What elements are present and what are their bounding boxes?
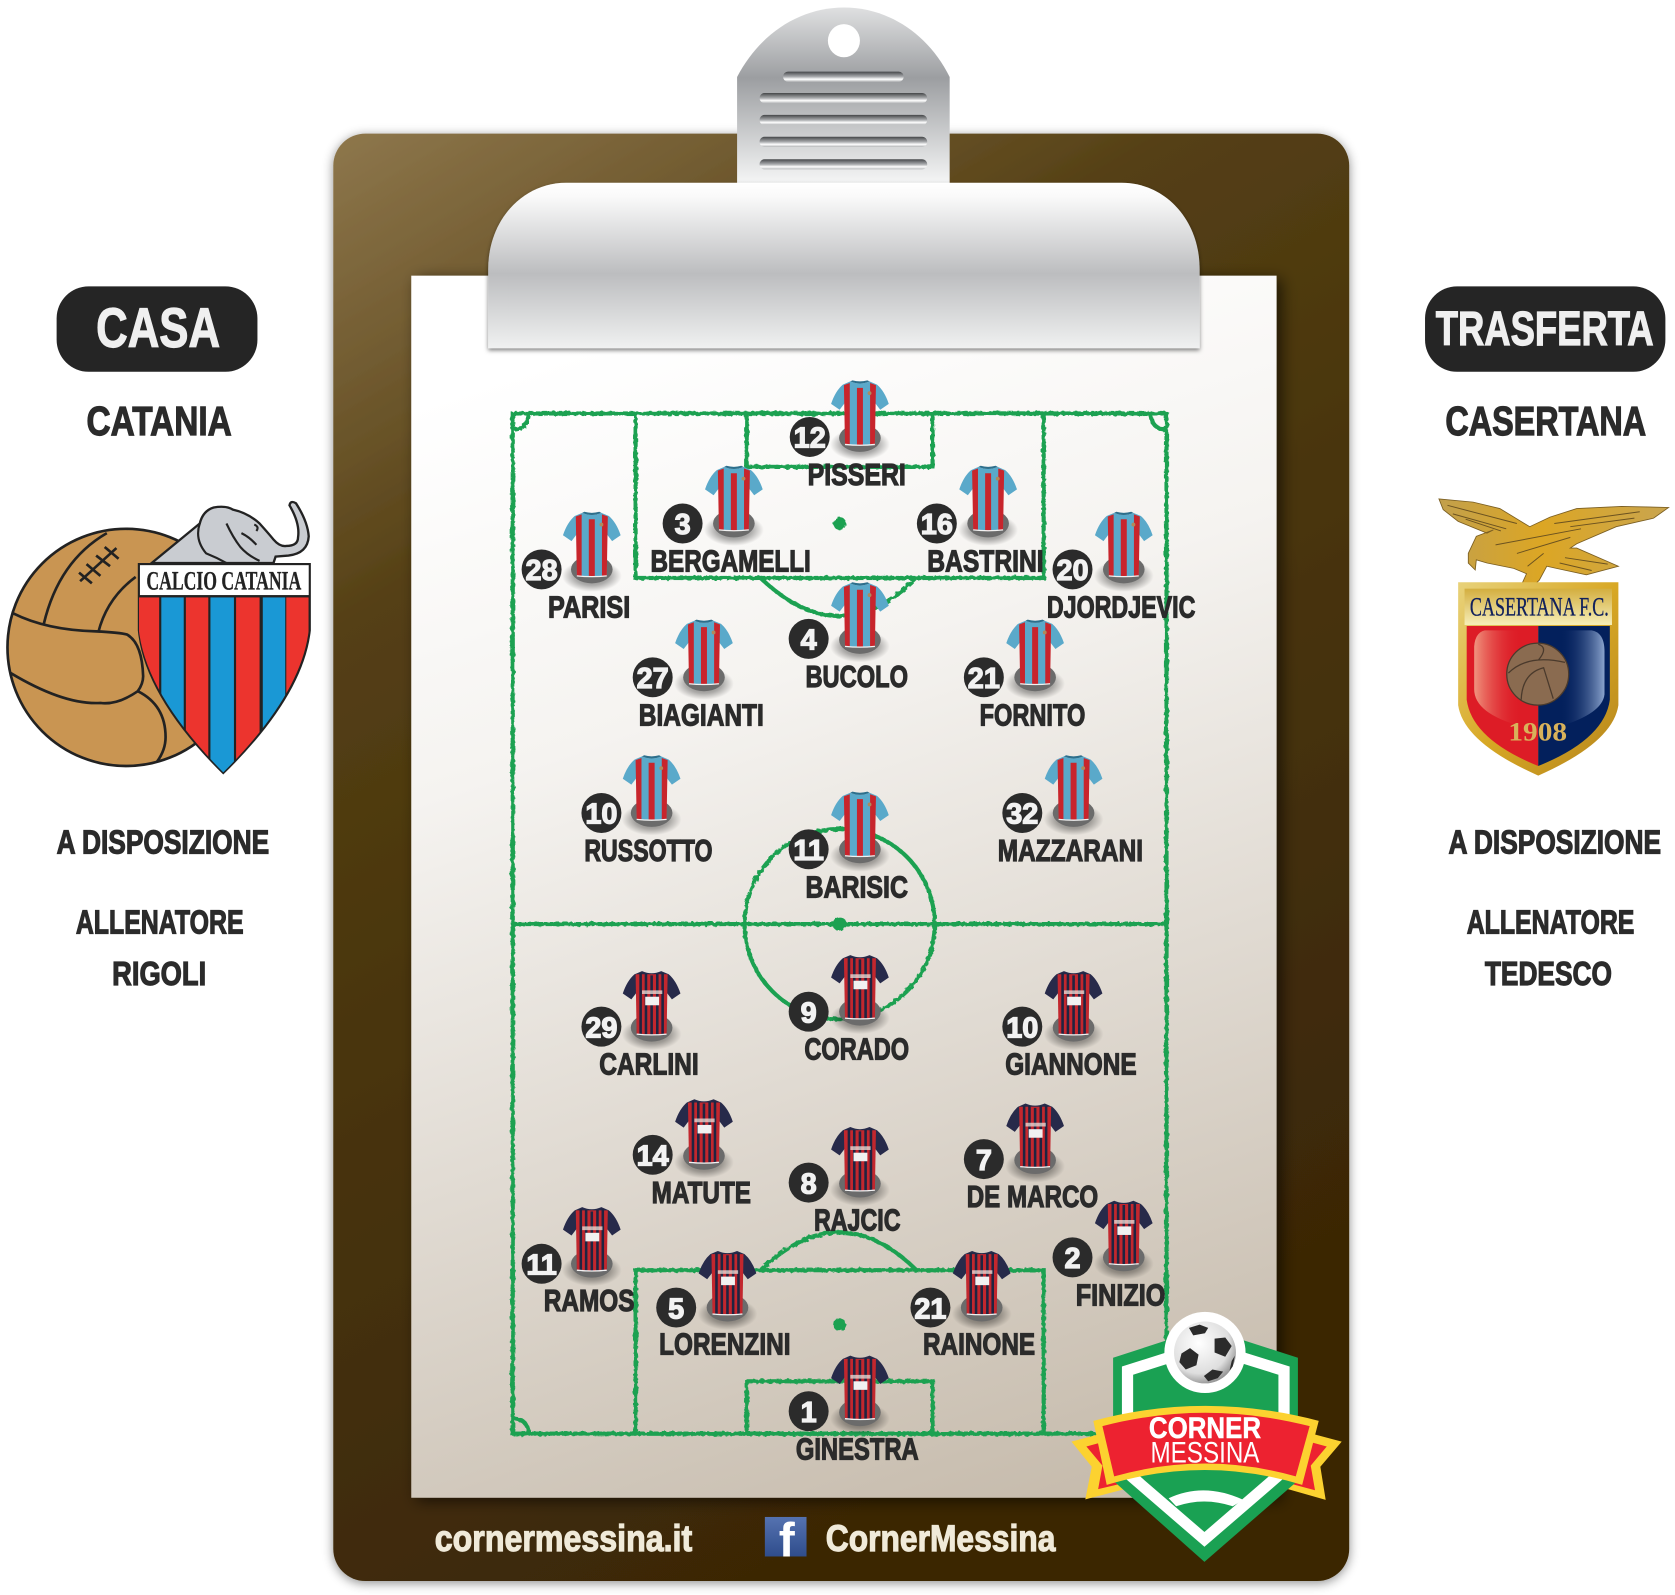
jersey — [622, 755, 682, 835]
player: Bucolo — [789, 582, 908, 694]
name: BASTRINI — [927, 544, 1044, 579]
name: CORADO — [804, 1032, 909, 1067]
player: Ginestra — [789, 1356, 919, 1466]
player: Matute — [633, 1099, 751, 1210]
number badge: 12 — [794, 423, 826, 455]
player: Corado — [789, 955, 909, 1067]
player: Rajcic — [789, 1127, 901, 1238]
name: CARLINI — [599, 1047, 699, 1082]
number badge: 1 — [801, 1397, 817, 1429]
jersey — [830, 380, 890, 460]
player: Bastrini — [917, 466, 1044, 579]
player: Russotto — [581, 755, 713, 868]
player: Fornito — [964, 620, 1085, 732]
name: BERGAMELLI — [651, 544, 811, 579]
number badge: 14 — [637, 1141, 669, 1173]
ball — [1164, 1312, 1246, 1393]
logo: Calcio Catania — [7, 502, 311, 775]
jersey — [830, 1127, 890, 1206]
jersey — [698, 1251, 757, 1330]
shield — [1113, 1328, 1298, 1562]
number badge: 11 — [526, 1249, 557, 1281]
old leather ball — [7, 529, 245, 766]
name: BARISIC — [805, 869, 908, 904]
clip tab — [737, 8, 950, 184]
football pitch — [513, 413, 1167, 1434]
home coach name: RIGOLI — [112, 956, 206, 993]
home coach label: ALLENATORE — [76, 905, 244, 942]
number badge: 20 — [1056, 555, 1089, 587]
footer facebook name: CornerMessina — [826, 1517, 1056, 1559]
footer website: cornermessina.it — [435, 1517, 692, 1559]
jersey — [704, 466, 764, 546]
name: RUSSOTTO — [584, 833, 713, 868]
shield ball — [1507, 643, 1569, 705]
name: MATUTE — [652, 1175, 751, 1210]
number badge: 7 — [976, 1145, 992, 1177]
name: PISSERI — [808, 457, 906, 492]
number badge — [663, 504, 703, 543]
away pill — [1425, 286, 1665, 372]
clip base — [488, 183, 1200, 348]
logo: Casertana — [1439, 499, 1669, 776]
number badge: 8 — [801, 1168, 817, 1200]
number badge: 16 — [921, 509, 953, 541]
name: PARISI — [548, 590, 630, 625]
jersey — [830, 792, 890, 872]
player: Ramos — [522, 1207, 635, 1318]
logo text: CORNER — [1149, 1412, 1261, 1445]
name: GIANNONE — [1005, 1047, 1137, 1082]
logo: Corner Messina — [1071, 1312, 1342, 1562]
jersey — [958, 466, 1018, 546]
jersey — [1005, 1104, 1065, 1183]
number badge: 21 — [968, 663, 1000, 695]
eagle — [1439, 499, 1669, 587]
name: RAJCIC — [814, 1203, 901, 1238]
player: Bergamelli — [651, 466, 811, 579]
home bench label: A DISPOSIZIONE — [57, 825, 269, 862]
paper sheet — [411, 276, 1277, 1498]
player: Djordjevic — [1047, 512, 1195, 625]
jersey — [1044, 755, 1103, 835]
jersey — [1005, 620, 1065, 700]
home pill — [57, 286, 257, 372]
home pill: CASA — [96, 297, 220, 359]
player: De Marco — [964, 1104, 1098, 1214]
player: Mazzarani — [998, 755, 1143, 868]
founding year: 1908 — [1508, 716, 1567, 746]
number badge: 5 — [668, 1293, 684, 1325]
name: FINIZIO — [1076, 1277, 1165, 1312]
number badge: 21 — [914, 1293, 946, 1325]
name: RAINONE — [923, 1327, 1035, 1362]
jersey — [830, 1356, 890, 1435]
ribbon — [1093, 1406, 1319, 1485]
jersey — [1094, 1201, 1154, 1280]
shield text: CALCIO CATANIA — [146, 566, 302, 596]
player: Barisic — [789, 792, 908, 904]
jersey — [674, 620, 734, 700]
name: BIAGIANTI — [639, 697, 764, 732]
name: FORNITO — [980, 697, 1085, 732]
name: MAZZARANI — [998, 833, 1143, 868]
player: Pisseri — [790, 380, 906, 492]
name: LORENZINI — [659, 1327, 790, 1362]
jersey — [1094, 512, 1154, 592]
jersey — [952, 1251, 1012, 1330]
shield — [138, 563, 311, 775]
jersey — [830, 582, 890, 662]
shield — [1458, 582, 1618, 776]
number badge — [1053, 549, 1092, 589]
home team name: CATANIA — [87, 398, 232, 444]
number badge: 27 — [637, 663, 669, 695]
jersey — [1044, 971, 1103, 1050]
icon: facebook: f — [779, 1513, 796, 1567]
elephant — [152, 502, 309, 563]
number badge: 10 — [585, 799, 617, 831]
player: Parisi — [522, 512, 630, 625]
player: Biagianti — [633, 620, 764, 732]
number badge: 28 — [526, 555, 558, 587]
clipboard board — [333, 134, 1349, 1581]
jersey — [562, 1207, 622, 1286]
player: Carlini — [581, 971, 699, 1082]
number badge: 3 — [675, 509, 691, 541]
name: DJORDJEVIC — [1047, 590, 1195, 625]
name: BUCOLO — [805, 659, 908, 694]
jersey — [562, 512, 622, 592]
number badge: 32 — [1006, 799, 1038, 831]
player: Lorenzini — [656, 1251, 790, 1362]
jersey — [830, 955, 890, 1034]
logo text: MESSINA — [1150, 1436, 1259, 1469]
name: RAMOS — [544, 1283, 635, 1318]
name: DE MARCO — [967, 1179, 1098, 1214]
jersey — [622, 971, 682, 1050]
shield text: CASERTANA F.C. — [1470, 591, 1609, 621]
ribbon tails — [1071, 1428, 1342, 1500]
away coach name: TEDESCO — [1485, 956, 1612, 993]
jersey — [674, 1099, 734, 1178]
number badge: 11 — [793, 835, 824, 867]
number badge: 9 — [801, 997, 817, 1029]
player: Rainone — [910, 1251, 1035, 1362]
number badge: 29 — [585, 1012, 617, 1044]
player: Finizio — [1053, 1201, 1165, 1312]
icon: facebook — [765, 1513, 807, 1567]
number badge: 10 — [1006, 1012, 1038, 1044]
name: GINESTRA — [796, 1431, 919, 1466]
number badge — [1002, 793, 1042, 833]
player: Giannone — [1002, 971, 1137, 1082]
number badge: 4 — [801, 625, 817, 657]
number badge: 2 — [1064, 1243, 1081, 1275]
